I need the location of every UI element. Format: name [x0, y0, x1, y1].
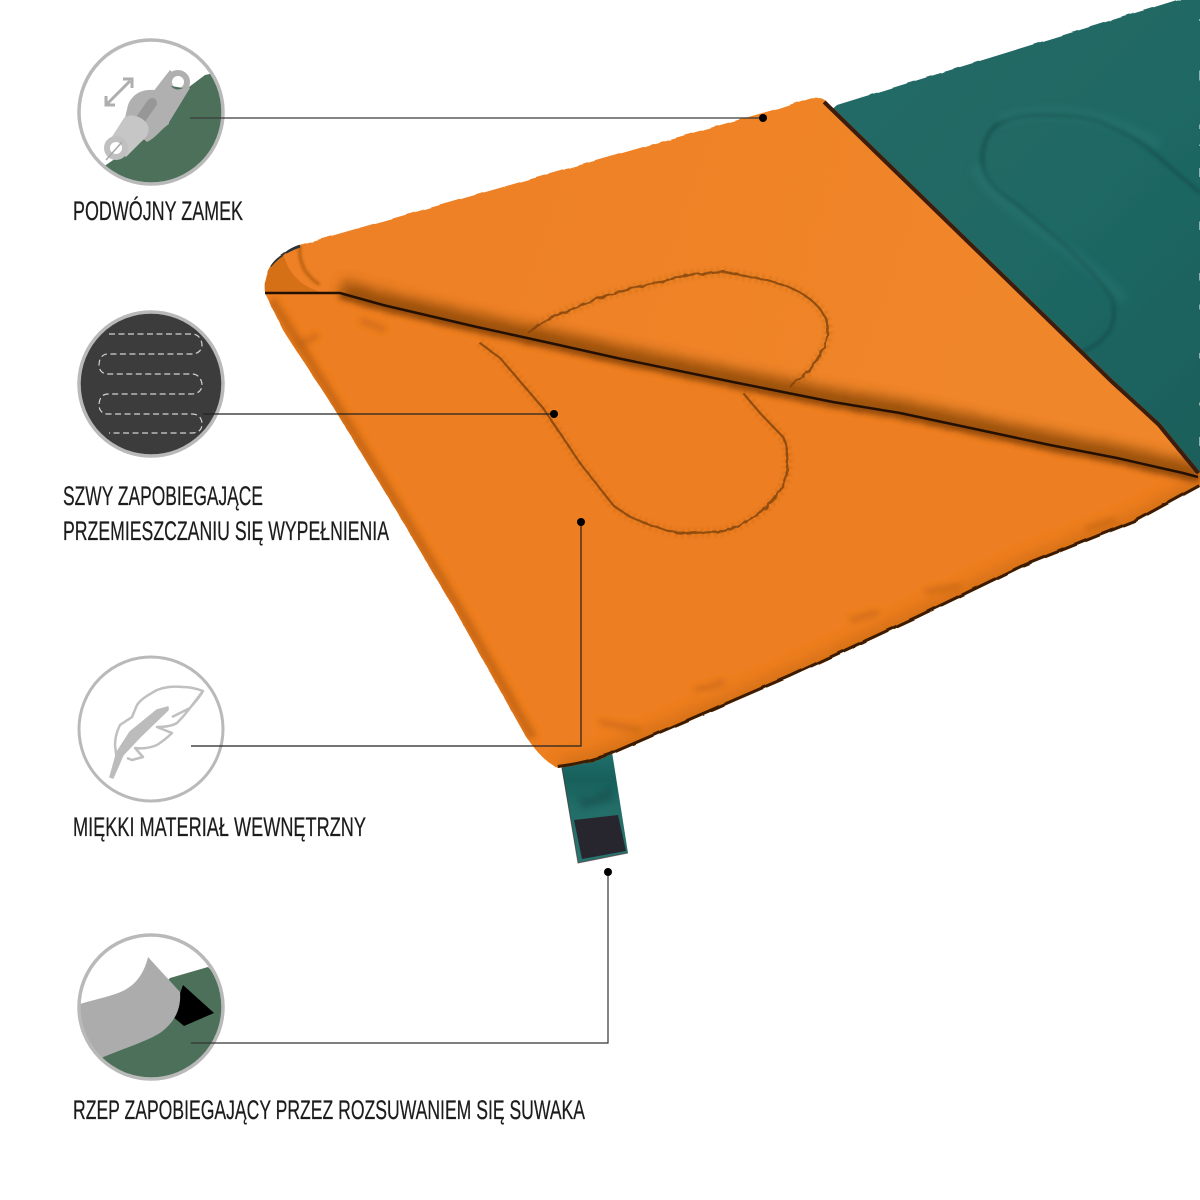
teal outer shell — [820, 0, 1200, 480]
label: velcro: RZEP ZAPOBIEGAJĄCY PRZEZ ROZSUWANIEM SIĘ SUWAKA — [73, 1095, 585, 1125]
label: soft inner material: MIĘKKI MATERIAŁ WEWNĘTRZNY — [73, 812, 366, 842]
label: anti-shift stitching — [63, 481, 389, 546]
leader line: zipper — [190, 114, 767, 122]
icon: anti-shift stitching — [79, 312, 223, 456]
icon: double zipper — [77, 38, 225, 186]
wrinkles — [298, 320, 1115, 730]
lower seam — [480, 343, 788, 533]
label: anti-shift stitching: PRZEMIESZCZANIU SIĘ WYPEŁNIENIA — [63, 516, 389, 546]
icon: velcro flap — [77, 933, 225, 1081]
icon: feather — [79, 657, 223, 801]
label: double zipper: PODWÓJNY ZAMEK — [73, 195, 243, 226]
upper orange flap — [250, 90, 1200, 490]
leader line: velcro — [191, 868, 612, 1043]
fold line — [265, 293, 1198, 477]
leader line: material — [191, 518, 585, 746]
leader line: stitching — [203, 410, 558, 418]
label: anti-shift stitching: SZWY ZAPOBIEGAJĄCE — [63, 481, 263, 511]
upper seam — [527, 272, 828, 387]
sleeping bag illustration — [250, 0, 1200, 863]
loop tab with velcro — [560, 752, 628, 863]
lower orange lining — [250, 280, 1200, 780]
